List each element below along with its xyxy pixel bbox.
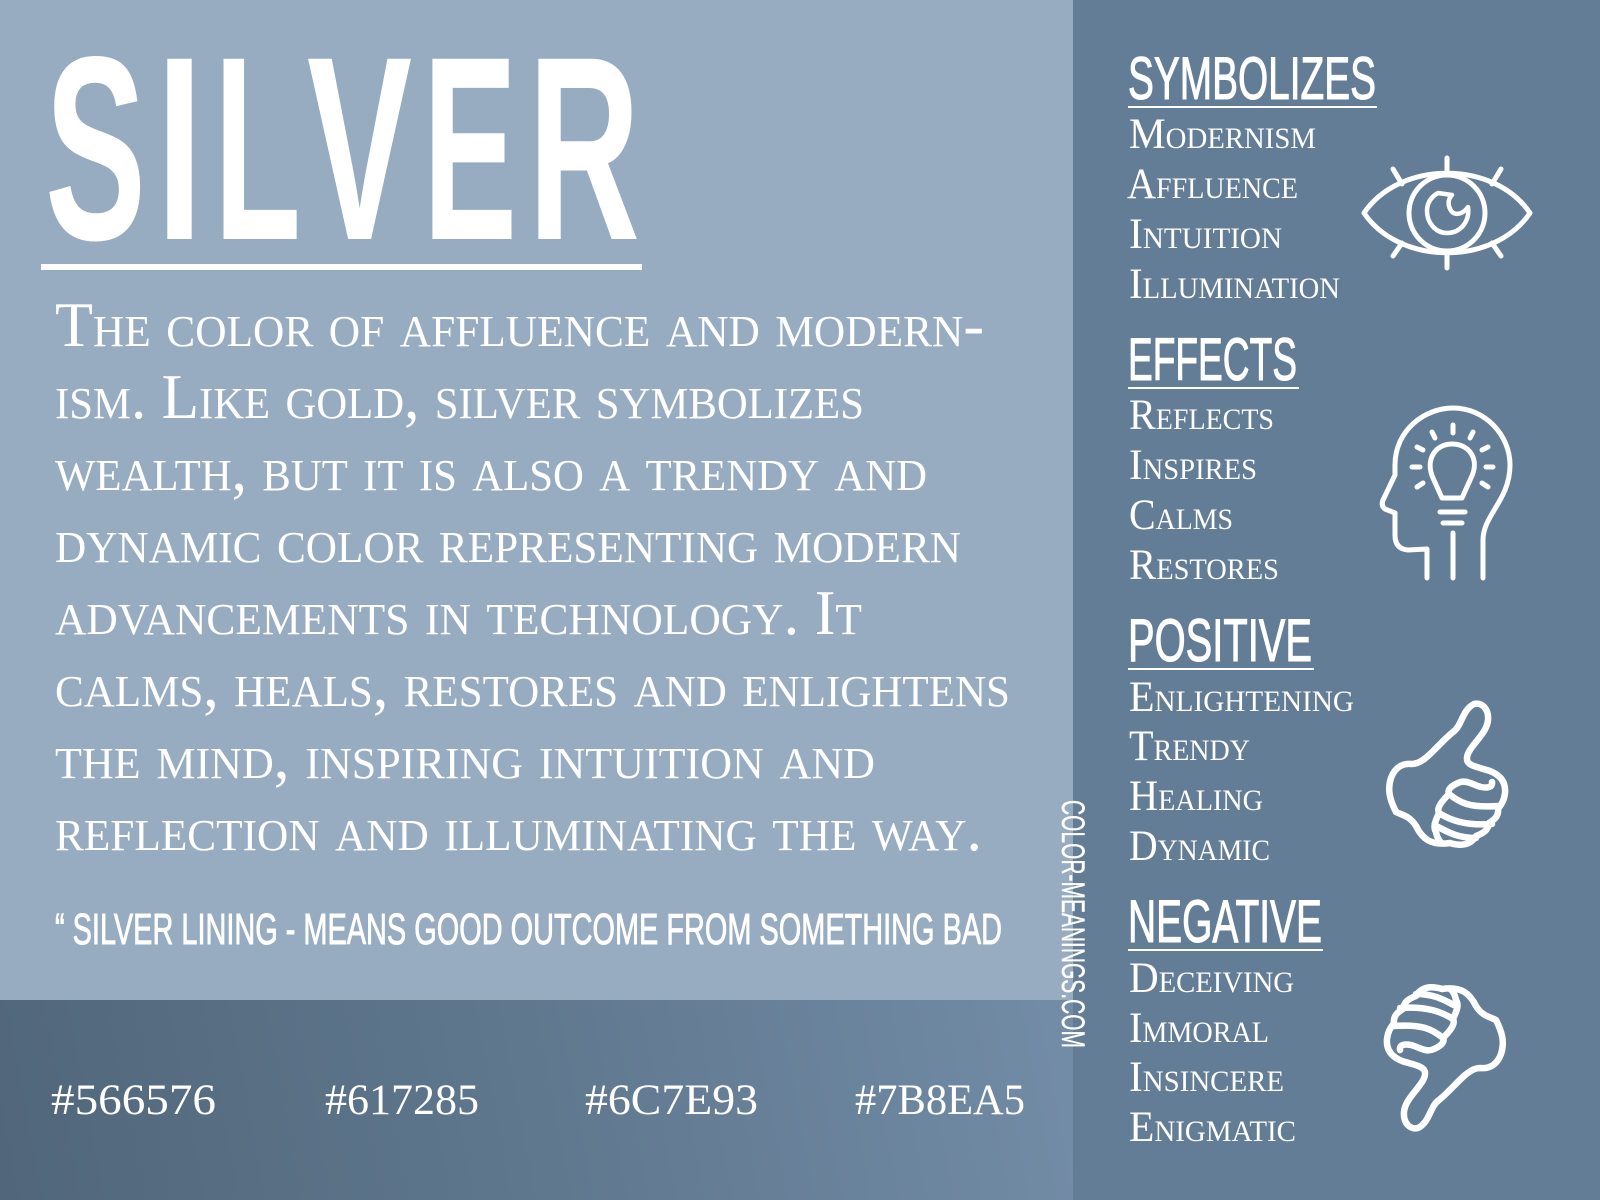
- list: negative: Enigmatic: [1129, 1104, 1296, 1151]
- title: I: [156, 2, 203, 295]
- icon: thumbs up: [1389, 704, 1505, 845]
- text block: description: the mind, inspiring intuition and: [55, 722, 875, 792]
- panel: symbolizes: [1127, 45, 1530, 308]
- icon: head with light bulb: [1382, 408, 1510, 578]
- list: negative: Immoral: [1129, 1005, 1269, 1052]
- list: positive: Healing: [1129, 773, 1263, 820]
- title: S: [45, 2, 146, 295]
- icon: thumbs down: [1387, 987, 1503, 1128]
- heading: effects: EFFECTS: [1128, 326, 1297, 393]
- list: symbolizes: [1127, 111, 1340, 308]
- panel: main background: [0, 0, 1073, 1000]
- swatch codes: #7B8EA5: [855, 1077, 1025, 1124]
- text block: description: wealth, but it is also a trendy and: [55, 434, 927, 504]
- list: symbolizes: Modernism: [1129, 111, 1316, 158]
- list: negative: Deceiving: [1129, 955, 1294, 1002]
- list: negative: Insincere: [1129, 1054, 1284, 1101]
- text block: description: dynamic color representing modern: [55, 506, 961, 576]
- heading: negative: NEGATIVE: [1128, 888, 1322, 955]
- list: effects: Reflects: [1129, 392, 1274, 439]
- icon: eye: [1364, 158, 1530, 268]
- text block: description: calms, heals, restores and enlightens: [55, 650, 1010, 720]
- panel: sidebar background: [1073, 0, 1600, 1200]
- text block: description: reflection and illuminating the way.: [55, 794, 982, 864]
- list: positive: Enlightening: [1129, 674, 1354, 721]
- swatch codes: #6C7E93: [585, 1077, 758, 1124]
- title: E: [423, 2, 517, 295]
- list: effects: Calms: [1129, 492, 1233, 539]
- panel: swatch band: [0, 1000, 1073, 1200]
- panel: effects: [1128, 326, 1510, 589]
- list: symbolizes: Illumination: [1129, 261, 1340, 308]
- swatch codes: [51, 1077, 1025, 1124]
- heading: positive: POSITIVE: [1128, 607, 1312, 674]
- panel: negative: [1128, 888, 1503, 1151]
- text block: description: [55, 290, 1010, 864]
- text block: description: The color of affluence and modern-: [55, 290, 984, 360]
- list: effects: Restores: [1129, 542, 1279, 589]
- title: [41, 2, 642, 295]
- list: negative: [1129, 955, 1296, 1151]
- list: positive: [1129, 674, 1354, 870]
- vertical site credit: COLOR-MEANINGS.COM: [1055, 800, 1091, 1048]
- list: positive: Trendy: [1129, 723, 1250, 770]
- text block: description: advancements in technology. It: [55, 578, 862, 648]
- title: V: [307, 2, 413, 295]
- list: positive: Dynamic: [1129, 823, 1270, 870]
- list: symbolizes: Intuition: [1129, 211, 1282, 258]
- text block: description: ism. Like gold, silver symbolizes: [55, 362, 864, 432]
- swatch codes: #617285: [325, 1077, 479, 1124]
- swatch codes: #566576: [51, 1077, 216, 1124]
- list: effects: [1129, 392, 1279, 589]
- callout: quote: “ SILVER LINING - MEANS GOOD OUTCOME FROM SOMETHING BAD: [55, 905, 1002, 954]
- list: effects: Inspires: [1129, 442, 1257, 489]
- heading: symbolizes: SYMBOLIZES: [1128, 45, 1376, 112]
- title: R: [528, 2, 640, 295]
- title: L: [214, 2, 301, 295]
- list: symbolizes: Affluence: [1127, 161, 1298, 208]
- panel: positive: [1128, 607, 1505, 870]
